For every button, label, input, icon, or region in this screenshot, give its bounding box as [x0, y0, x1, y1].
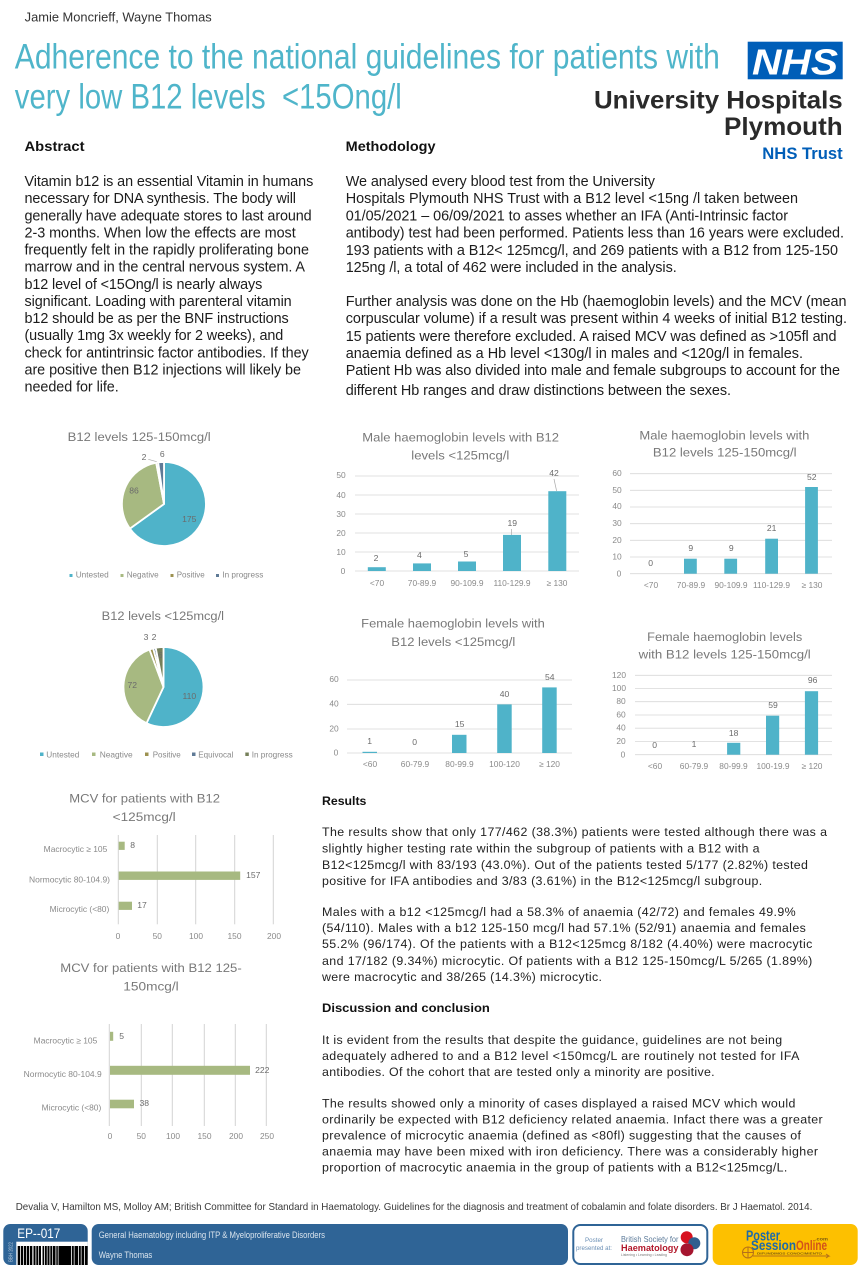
value labels: 4 — [417, 550, 422, 560]
y axis labels: 60 — [616, 710, 626, 720]
text block: methodology body: 01/05/2021 – 06/09/2021 to asses whether an IFA (Anti-Intrinsic factor — [346, 208, 788, 224]
legend: In progress — [222, 570, 263, 580]
value labels: 54 — [545, 672, 555, 682]
conference label: BBH 2022 — [8, 1242, 14, 1262]
pie values — [128, 632, 196, 701]
heading: abstract: Abstract — [24, 138, 85, 154]
y axis labels — [612, 670, 626, 760]
text block: methodology body: Patient Hb was also divided into male and female subgroups to account for the — [346, 363, 840, 379]
y axis labels: 100 — [612, 683, 626, 693]
y axis labels: 20 — [612, 535, 622, 545]
text block: methodology body: 193 patients with a B12< 125mcg/l, and 269 patients with a B12 from 125-150 — [346, 243, 838, 259]
text block: results paragraph 2: were macrocytic and 38/265 (14.3%) microcytic. — [321, 970, 602, 984]
text block: abstract body: are positive then B12 injections will likely be — [24, 362, 301, 378]
title — [15, 38, 720, 116]
value labels: 0 — [412, 737, 417, 747]
text block: results paragraph 1: The results show that only 177/462 (38.3%) patients were tested although there was a — [322, 825, 827, 839]
y axis labels: 0 — [341, 566, 346, 576]
value labels: 0 — [652, 740, 657, 750]
x axis labels: <70 — [644, 580, 658, 590]
text block: results paragraph 1: slightly higher testing rate within the subgroup of patients with a B12 with a — [322, 842, 760, 856]
legend: Untested — [76, 570, 109, 580]
value labels: 157 — [246, 870, 261, 880]
text block: methodology body — [346, 174, 847, 399]
text block: results paragraph 1: B12<125mcg/l with 83/193 (43.0%). Out of the patients tested 5/177 (2.82%) tested — [322, 858, 808, 872]
pie slices — [122, 462, 206, 546]
text block: abstract body: generally have adequate stores to last around — [24, 208, 312, 224]
y axis labels: 60 — [329, 674, 339, 684]
text block: abstract body: significant. Loading with parenteral vitamin — [24, 294, 292, 310]
pie values: 110 — [182, 691, 196, 701]
heading: results: Results — [322, 794, 367, 808]
chart title: levels <125mcg/l — [411, 448, 509, 462]
organisation name: University Hospitals — [594, 86, 843, 114]
x axis labels: <60 — [648, 761, 662, 771]
icon: globe with arrow — [742, 1247, 829, 1258]
reference: Devalia V, Hamilton MS, Molloy AM; British Committee for Standard in Haematology. Guidelines for the diagnosis and treatment of cobalamin and folate disorders. Br J Haematol. 2014. — [16, 1202, 812, 1213]
organisation name: Plymouth — [724, 113, 843, 141]
value labels: 5 — [119, 1031, 124, 1041]
value labels: 52 — [807, 472, 817, 482]
pie values: 2 — [152, 632, 157, 642]
pie values: 6 — [158, 650, 163, 660]
x axis labels: 50 — [153, 931, 162, 941]
value labels: 19 — [508, 518, 517, 528]
logo wordmark: DIFUNDIMOS CONOCIMIENTO — [757, 1252, 823, 1256]
y axis labels: 80 — [616, 696, 626, 706]
value labels: 9 — [729, 543, 734, 553]
poster ID: EP--017 — [17, 1225, 60, 1241]
bars — [119, 842, 240, 910]
text block: discussion paragraph 2: proportion of macrocytic anaemia in the group of patients with a B12<125mcg/L. — [322, 1161, 787, 1175]
text block: abstract body: needed for life. — [24, 380, 119, 396]
text block: results paragraph 1: positive for IFA antibodies and 3/83 (3.61%) in the B12<125mcg/l subgroup. — [322, 874, 762, 888]
value labels: 59 — [768, 700, 778, 710]
text block: abstract body: b12 level of <15Ong/l is nearly always — [24, 277, 262, 293]
x axis labels: 80-99.9 — [719, 761, 748, 771]
x axis labels — [648, 761, 823, 771]
text block: discussion paragraph 2: The results showed only a minority of cases displayed a raised MCV which would — [322, 1097, 795, 1111]
category labels — [29, 844, 110, 914]
x axis labels: ≥ 120 — [802, 761, 823, 771]
chart title — [361, 616, 545, 649]
text block: methodology body: antibody) test had been performed. Patients less than 16 years were excluded. — [346, 225, 844, 241]
icon: society circles — [680, 1231, 700, 1256]
text block: discussion paragraph 2 — [322, 1097, 823, 1175]
category labels: Macrocytic ≥ 105 — [44, 844, 108, 854]
authors: Jamie Moncrieff, Wayne Thomas — [25, 10, 212, 24]
text block: discussion paragraph 1: antibodies. Of the cohort that are tested only a minority are positive. — [322, 1065, 715, 1079]
value labels: 8 — [130, 840, 135, 850]
legend: Untested — [46, 750, 80, 760]
text block: abstract body: Vitamin b12 is an essential Vitamin in humans — [24, 174, 313, 190]
value labels: 222 — [255, 1065, 270, 1075]
value labels: 38 — [140, 1098, 149, 1108]
chart title — [362, 430, 559, 462]
text block: discussion paragraph 1: adequately adhered to and a B12 level <150mcg/L are routinely not tested for IFA — [322, 1049, 800, 1063]
value labels — [130, 840, 261, 910]
logo wordmark: .com — [815, 1236, 828, 1242]
pie values: 175 — [182, 514, 197, 524]
chart title: Male haemoglobin levels with — [639, 428, 810, 442]
legend: Positive — [153, 750, 181, 760]
text block: discussion paragraph 2: anaemia may have been mixed with iron deficiency. There was a considerably higher — [322, 1145, 818, 1159]
icon: NHS lozenge: NHS — [752, 42, 838, 82]
y axis labels: 50 — [336, 470, 346, 480]
y axis labels: 40 — [616, 722, 626, 732]
y axis labels: 30 — [336, 509, 346, 519]
society name — [621, 1235, 679, 1257]
text block: discussion paragraph 2: ordinarily be expected with B12 deficiency related anaemia. Infact there was a greater — [322, 1113, 823, 1127]
pie values — [129, 449, 197, 524]
bars — [110, 1032, 250, 1108]
x axis labels — [644, 580, 823, 590]
y axis labels: 120 — [612, 670, 626, 680]
y axis labels — [612, 468, 622, 578]
y axis labels: 60 — [612, 468, 622, 478]
presented at label: Poster — [585, 1238, 603, 1244]
text block: results paragraph 2 — [321, 905, 812, 984]
society name: British Society for — [621, 1235, 679, 1244]
pie values: 86 — [129, 485, 139, 495]
text block: abstract body: necessary for DNA synthesis. The body will — [24, 191, 296, 207]
presenter: Wayne Thomas — [99, 1250, 153, 1260]
chart title: with B12 levels 125-150mcg/l — [638, 648, 811, 662]
x axis labels: 150 — [198, 1131, 212, 1141]
y axis labels: 40 — [336, 490, 346, 500]
bars — [362, 687, 557, 753]
text block: abstract body: frequently felt in the rapidly proliferating bone — [24, 242, 309, 258]
y axis labels: 0 — [621, 750, 626, 760]
text block: abstract body — [24, 174, 313, 396]
organisation name — [594, 86, 843, 163]
value labels — [367, 672, 555, 747]
pie slices — [123, 647, 204, 727]
value labels: 1 — [692, 739, 697, 749]
x axis labels: 90-109.9 — [714, 580, 748, 590]
value labels: 96 — [808, 675, 818, 685]
panel: discussion and conclusion — [322, 1001, 823, 1175]
text block: abstract body: b12 should be as per the BNF instructions — [24, 311, 289, 327]
text block: results paragraph 2: and 17/182 (9.34%) microcytic. Of patients with a B12 125-150mcg/L 5/265 (1.89%) — [322, 954, 812, 968]
chart title: MCV for patients with B12 125- — [60, 961, 242, 975]
chart: female haemoglobin B12 125-150 — [612, 630, 832, 771]
x axis labels: ≥ 130 — [547, 578, 568, 588]
title: very low B12 levels <15Ong/l — [15, 78, 402, 116]
y axis labels: 10 — [612, 552, 622, 562]
x axis labels: 110-129.9 — [493, 578, 531, 588]
x axis labels: ≥ 130 — [802, 580, 823, 590]
value labels: 1 — [367, 736, 372, 746]
x axis labels: 60-79.9 — [401, 759, 430, 769]
y axis labels: 30 — [612, 518, 622, 528]
x axis labels: 60-79.9 — [680, 761, 709, 771]
value labels — [648, 472, 817, 568]
x axis labels: <60 — [363, 759, 377, 769]
x axis labels: 0 — [116, 931, 121, 941]
y axis labels — [336, 470, 346, 576]
pie values: 6 — [160, 449, 165, 459]
text block: methodology body: anaemia defined as a Hb level <130g/l in males and <120g/l in females. — [346, 346, 803, 362]
x axis labels: 110-129.9 — [753, 580, 790, 590]
value labels — [119, 1031, 270, 1108]
y axis labels: 10 — [336, 547, 346, 557]
bars — [368, 491, 566, 571]
y axis labels: 40 — [612, 501, 622, 511]
society name: Haematology — [621, 1243, 679, 1254]
x axis labels — [363, 759, 560, 769]
x axis labels: 200 — [229, 1131, 243, 1141]
pie values: 3 — [144, 632, 149, 642]
chart title: B12 levels <125mcg/l — [102, 609, 224, 623]
value labels: 2 — [374, 553, 379, 563]
x axis labels: 90-109.9 — [450, 578, 484, 588]
value labels — [374, 468, 559, 563]
text block: methodology body: corpuscular volume) if a result was present within 4 weeks of initial B12 testing. — [346, 311, 847, 327]
chart title: 150mcg/l — [123, 980, 179, 994]
category labels: Microcytic (<80) — [42, 1102, 102, 1112]
category labels — [24, 1035, 102, 1112]
chart: pie B12 levels below 125 — [40, 609, 293, 760]
legend — [40, 750, 293, 760]
text block: methodology body: Further analysis was done on the Hb (haemoglobin levels) and the MCV (mean — [346, 294, 846, 310]
value labels: 42 — [549, 468, 559, 478]
text block: results paragraph 1 — [322, 825, 827, 888]
y axis labels: 20 — [329, 724, 339, 734]
text block: methodology body: We analysed every blood test from the University — [346, 174, 656, 190]
value labels: 17 — [137, 900, 147, 910]
text block: results paragraph 2: (54/110). Males with a b12 125-150 mcg/l had 57.1% (52/91) anaemia and females — [322, 921, 806, 935]
chart: MCV B12 below 125 — [29, 792, 281, 941]
chart: pie B12 levels 125-150 — [68, 430, 263, 580]
presented at label — [576, 1238, 612, 1252]
chart: female haemoglobin B12 below 125 — [329, 616, 572, 769]
value labels: 21 — [767, 523, 777, 533]
organisation name: NHS Trust — [762, 144, 843, 163]
chart title: Female haemoglobin levels — [647, 630, 802, 644]
barcode — [16, 1242, 88, 1265]
x axis labels — [108, 1131, 274, 1141]
heading: methodology: Methodology — [346, 138, 436, 154]
chart title — [639, 428, 810, 460]
logo wordmark: Session — [751, 1237, 796, 1253]
logo wordmark: Online — [796, 1237, 827, 1253]
bars — [684, 487, 818, 574]
value labels: 9 — [688, 543, 693, 553]
legend: Negative — [127, 570, 159, 580]
heading: discussion: Discussion and conclusion — [322, 1001, 490, 1015]
presented at label: presented at: — [576, 1246, 612, 1252]
footer: British Society for Haematology logo box — [573, 1225, 707, 1264]
legend: Equivocal — [198, 750, 233, 760]
topic: General Haematology including ITP & Myeloproliferative Disorders — [99, 1230, 326, 1240]
chart title: Female haemoglobin levels with — [361, 616, 545, 630]
footer: PosterSessionOnline logo box — [713, 1224, 858, 1265]
bars — [727, 691, 818, 755]
x axis labels: 100 — [166, 1131, 180, 1141]
y axis labels: 20 — [336, 528, 346, 538]
chart title — [69, 792, 220, 824]
logo wordmark — [746, 1228, 828, 1256]
pie values: 2 — [142, 452, 147, 462]
y axis labels: 0 — [617, 568, 622, 578]
x axis labels: <70 — [370, 578, 384, 588]
text block: abstract body: marrow and in the central nervous system. A — [24, 260, 305, 276]
chart title — [60, 961, 242, 994]
title: Adherence to the national guidelines for patients with — [15, 38, 720, 76]
category labels: Macrocytic ≥ 105 — [34, 1035, 98, 1045]
x axis labels: 200 — [267, 931, 281, 941]
logo wordmark: Poster — [746, 1228, 780, 1244]
y axis labels: 40 — [329, 698, 339, 708]
text block: discussion paragraph 1: It is evident from the results that despite the guidance, guidelines are not being — [322, 1033, 782, 1047]
x axis labels: 50 — [137, 1131, 146, 1141]
y axis labels: 20 — [616, 736, 626, 746]
panel: results — [321, 794, 827, 984]
chart: male haemoglobin B12 125-150 — [612, 428, 832, 590]
category labels: Normocytic 80-104.9 — [24, 1069, 102, 1079]
chart title: MCV for patients with B12 — [69, 792, 220, 806]
legend — [70, 570, 263, 580]
legend: In progress — [252, 750, 293, 760]
chart title — [638, 630, 811, 662]
category labels: Microcytic (<80) — [50, 904, 110, 914]
y axis labels: 0 — [334, 748, 339, 758]
value labels — [652, 675, 818, 750]
chart: MCV B12 125-150 — [24, 961, 274, 1141]
text block: results paragraph 2: 55.2% (96/174). Of the patients with a B12<125mcg 8/182 (4.40%) were macrocytic — [322, 937, 812, 951]
chart: male haemoglobin B12 below 125 — [336, 430, 579, 588]
value labels: 15 — [455, 719, 465, 729]
x axis labels: 70-89.9 — [677, 580, 706, 590]
chart title: B12 levels <125mcg/l — [391, 635, 515, 649]
x axis labels: ≥ 120 — [539, 759, 560, 769]
text block: abstract body: (usually 1mg 3x weekly for 2 weeks), and — [24, 328, 283, 344]
x axis labels: 70-89.9 — [408, 578, 437, 588]
x axis labels: 150 — [228, 931, 242, 941]
y axis labels — [329, 674, 339, 758]
text block: results paragraph 2: Males with a b12 <125mcg/l had a 58.3% of anaemia (42/72) and females 49.9% — [322, 905, 796, 919]
x axis labels: 100-19.9 — [756, 761, 790, 771]
y axis labels: 50 — [612, 485, 622, 495]
category labels: Normocytic 80-104.9) — [29, 874, 110, 884]
value labels: 5 — [464, 549, 469, 559]
value labels: 40 — [500, 689, 509, 699]
legend: Positive — [177, 570, 205, 580]
text block: methodology body: Hospitals Plymouth NHS Trust with a B12 level <15ng /l taken between — [346, 191, 798, 207]
text block: methodology body: 15 patients were therefore excluded. A raised MCV was defined as >105fl and — [346, 329, 836, 345]
x axis labels — [116, 931, 281, 941]
panel: methodology — [346, 138, 847, 399]
chart title: <125mcg/l — [113, 810, 176, 824]
text block: abstract body: check for antintrinsic factor antibodies. If they — [24, 345, 309, 361]
text block: discussion paragraph 1 — [322, 1033, 800, 1079]
x axis labels: 100-120 — [489, 759, 520, 769]
panel: abstract — [24, 138, 313, 396]
chart title: Male haemoglobin levels with B12 — [362, 430, 559, 444]
text block: methodology body: different Hb ranges and draw distinctions between the sexes. — [346, 383, 731, 399]
society name: Listening • Learning • Leading — [621, 1253, 667, 1257]
chart title: B12 levels 125-150mcg/l — [68, 430, 211, 444]
value labels: 18 — [729, 728, 739, 738]
x axis labels: 250 — [260, 1131, 274, 1141]
text block: methodology body: 125ng /l, a total of 462 were included in the analysis. — [346, 260, 677, 276]
footer: topic and presenter bar — [92, 1224, 568, 1265]
pie values: 72 — [128, 680, 137, 690]
legend: Neagtive — [100, 750, 133, 760]
text block: discussion paragraph 2: prevalence of microcytic anaemia (defined as <80fl) suggesting that the causes of — [322, 1129, 802, 1143]
footer: poster ID and barcode — [3, 1224, 88, 1265]
x axis labels: 100 — [189, 931, 203, 941]
x axis labels — [370, 578, 568, 588]
logo: NHS University Hospitals Plymouth — [594, 42, 843, 163]
x axis labels: 80-99.9 — [445, 759, 474, 769]
text block: abstract body: 2-3 months. When low the effects are most — [24, 225, 296, 241]
x axis labels: 0 — [108, 1131, 113, 1141]
value labels: 0 — [648, 558, 653, 568]
chart title: B12 levels 125-150mcg/l — [653, 446, 797, 460]
